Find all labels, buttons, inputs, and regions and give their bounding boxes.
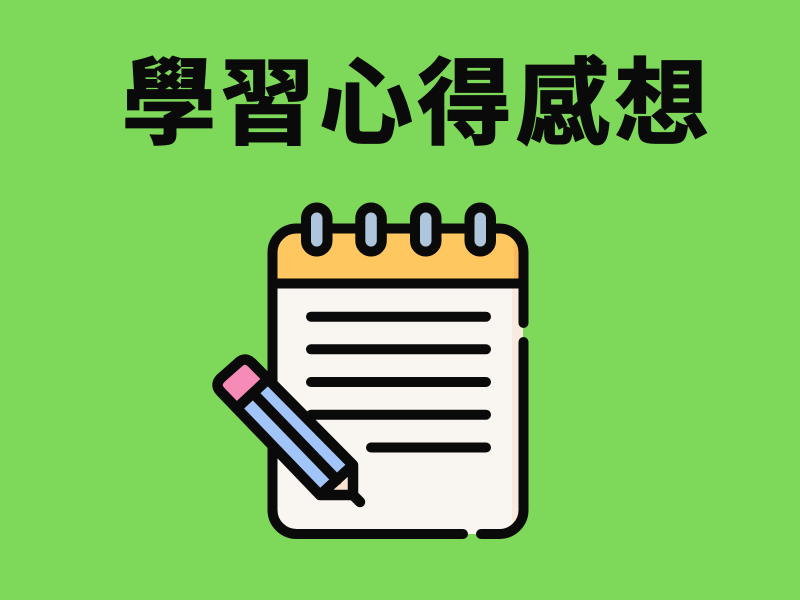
pencil eraser xyxy=(218,360,268,408)
title: 學習心得感想 xyxy=(122,51,713,156)
notebook page xyxy=(273,283,523,534)
pencil outline xyxy=(218,360,360,502)
pencil wood tip xyxy=(320,465,353,495)
header right shading xyxy=(514,232,523,283)
text lines xyxy=(311,317,486,448)
notebook outline xyxy=(272,228,524,534)
page right shading xyxy=(512,288,523,529)
icon: pencil xyxy=(218,360,360,502)
spiral rings xyxy=(306,208,491,252)
notebook header band xyxy=(273,228,523,283)
pencil body xyxy=(237,379,353,496)
icon: notebook xyxy=(272,208,524,534)
